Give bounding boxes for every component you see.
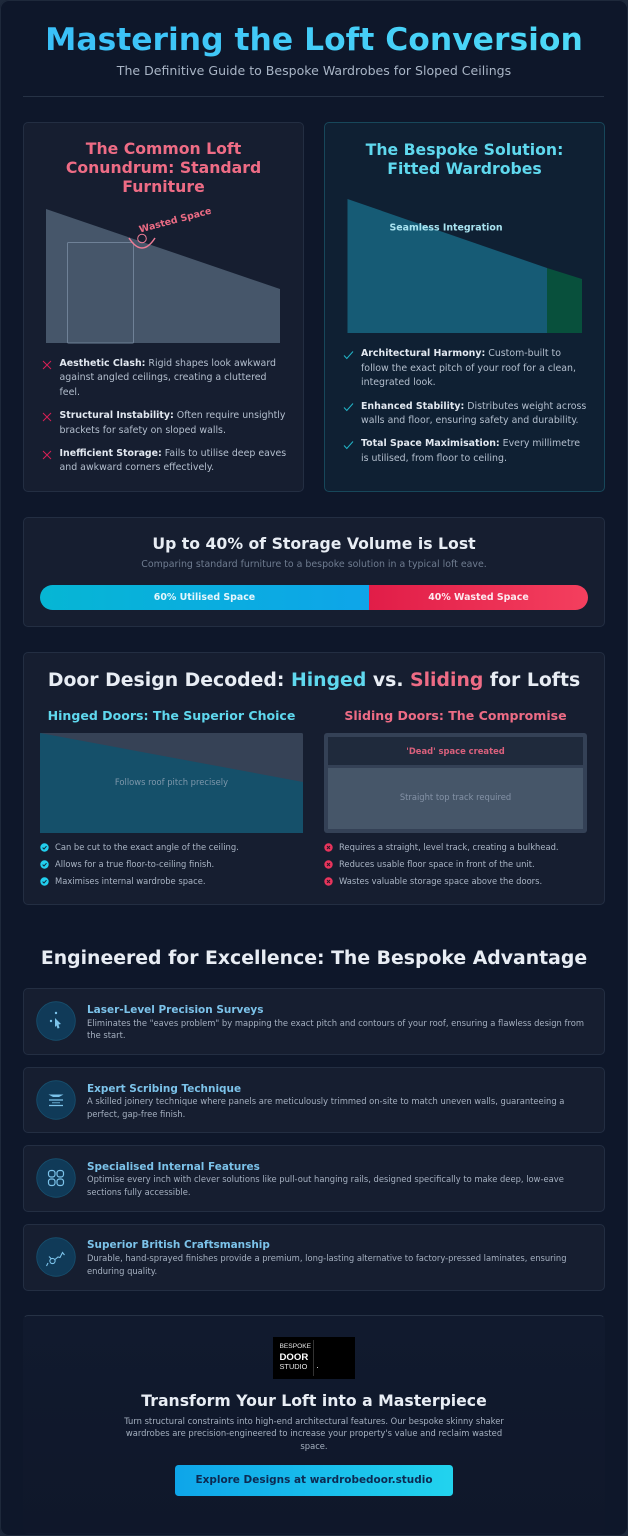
bar segment: 60% utilised [40,585,369,610]
card description: the start. [87,1030,126,1040]
card description: enduring quality. [87,1266,157,1276]
card title: Specialised Internal Features [87,1160,260,1172]
text: enhanced stability [361,400,586,426]
icon: check [344,441,354,450]
card description: Eliminates the "eaves problem" by mapping the exact pitch and contours of your roof, ensuring a flawless design from [87,1018,584,1028]
header [45,22,583,78]
subtitle: The Definitive Guide to Bespoke Wardrobes for Sloped Ceilings [117,63,511,78]
stat heading: Up to 40% of Storage Volume is Lost [152,534,476,552]
logo: Bespoke Door Studio [273,1337,355,1379]
diagram: hinged door: Follows roof pitch precisely [115,777,228,787]
CTA text: space. [300,1441,328,1451]
logo text: STUDIO [280,1362,307,1370]
list: problems [42,358,286,473]
text: inefficient storage: and awkward corners effectively. [60,462,214,473]
text: architectural harmony: integrated look. [361,377,436,388]
panel: storage volume stat [23,517,605,627]
text: internal space: Maximises internal wardrobe space. [55,876,206,886]
section heading: door design: Door Design Decoded: Hinged vs. Sliding for Lofts [48,670,580,691]
card description [87,1253,567,1276]
icon: check [344,403,354,412]
icon: cross badge [324,843,333,852]
card description [87,1174,564,1197]
title: Mastering the Loft Conversion [45,22,583,58]
panel heading: fitted wardrobes [366,140,563,178]
icon: cross badge [324,877,333,886]
text: enhanced stability: Enhanced Stability: Distributes weight across [361,400,586,412]
text: floor to ceiling: Allows for a true floor-to-ceiling finish. [55,859,214,869]
card description: Durable, hand-sprayed finishes provide a premium, long-lasting alternative to factory-pressed laminates, ensuring [87,1253,567,1263]
door front: Straight top track required [400,792,511,802]
section heading: bespoke advantage: Engineered for Excellence: The Bespoke Advantage [41,948,587,969]
icon: cross [42,360,52,370]
text: structural instability: Structural Instability: Often require unsightly [60,410,285,421]
text: architectural harmony [361,348,576,388]
panel: bespoke solution [324,122,605,492]
diagram: fitted wardrobe under sloped roof [348,199,582,333]
card description: sections fully accessible. [87,1187,191,1197]
panel heading: fitted wardrobes: The Bespoke Solution: [366,140,563,159]
icon: spray gun [36,1237,76,1277]
text: aesthetic clash: Aesthetic Clash: Rigid shapes look awkward [60,358,276,368]
diagram: hinged door [40,733,303,833]
icon: check [344,351,354,360]
list: sliding cons [324,842,559,886]
card title: Expert Scribing Technique [87,1082,241,1094]
diagram: sliding door [324,733,587,833]
card title: Superior British Craftsmanship [87,1238,270,1250]
card: internal features [23,1145,605,1212]
door front [328,768,583,829]
icon: scribing lines [36,1080,76,1120]
card description [87,1096,564,1119]
list: benefits [344,348,586,464]
panel heading: standard furniture: Furniture [122,177,205,196]
icon: check badge [40,877,49,886]
text: aesthetic clash: feel. [60,387,80,398]
CTA heading: Transform Your Loft into a Masterpiece [141,1390,487,1410]
text: inefficient storage [60,448,286,473]
dead space [328,737,583,765]
CTA button [175,1465,453,1496]
bar segment: 40% wasted: 40% Wasted Space [428,592,529,603]
dead space: 'Dead' space created [406,746,505,756]
panel heading: standard furniture [66,139,261,196]
bar segment: 40% wasted [369,585,588,610]
card: expert scribing [23,1067,605,1133]
panel: common loft conundrum [23,122,304,492]
logo text: DOOR [280,1352,308,1362]
diagram: standard furniture under sloped roof: Wasted Space [138,206,213,236]
CTA button: Explore Designs at wardrobedoor.studio [195,1474,433,1486]
card description: A skilled joinery technique where panels are meticulously trimmed on-site to match uneven walls, guaranteeing a [87,1096,564,1106]
text: exact angle: Can be cut to the exact angle of the ceiling. [55,842,239,852]
CTA text: wardrobes are precision-engineered to increase your property's value and reclaim wasted [126,1428,502,1438]
text: level track: Requires a straight, level track, creating a bulkhead. [339,842,559,852]
card title: Laser-Level Precision Surveys [87,1004,263,1016]
text: enhanced stability: walls and floor, ensuring safety and durability. [361,415,579,426]
panel heading: fitted wardrobes: Fitted Wardrobes [387,159,542,178]
text: floor space: Reduces usable floor space in front of the unit. [339,859,535,869]
card description [87,1018,584,1040]
text: total space maximisation: Total Space Maximisation: Every millimetre [361,438,580,449]
icon: laser target [36,1001,76,1041]
card: laser surveys [23,988,605,1055]
text: storage above doors: Wastes valuable storage space above the doors. [339,876,542,886]
text: total space maximisation: is utilised, from floor to ceiling. [361,453,507,464]
icon: cross [42,450,52,460]
card: british craftsmanship [23,1224,605,1291]
card description: Optimise every inch with clever solutions like pull-out hanging rails, designed specifically to make deep, low-eave [87,1174,564,1184]
card description: perfect, gap-free finish. [87,1109,185,1119]
list: hinged pros [40,842,239,886]
text: architectural harmony: Architectural Harmony: Custom-built to [361,348,561,359]
column heading: sliding: Sliding Doors: The Compromise [344,708,567,723]
text: structural instability: brackets for safety on sloped walls. [60,425,226,436]
logo text: BESPOKE [280,1343,311,1350]
icon: check badge [40,843,49,852]
diagram: standard furniture under sloped roof [46,206,280,344]
diagram: fitted wardrobe under sloped roof: Seamless Integration [389,222,503,234]
text: structural instability [60,410,286,436]
CTA text [124,1416,504,1451]
text: total space maximisation [361,438,580,464]
icon: cross [42,412,52,422]
panel: door design comparison [23,652,605,905]
icon: four rounded squares [36,1158,76,1198]
logo text [280,1343,311,1370]
icon: check badge [40,860,49,869]
text: aesthetic clash: against angled ceilings, creating a cluttered [60,372,267,383]
bar segment: 60% utilised: 60% Utilised Space [154,592,255,603]
text: architectural harmony: follow the exact pitch of your roof for a clean, [361,363,576,374]
text: aesthetic clash [60,358,276,398]
text: inefficient storage: Inefficient Storage: Fails to utilise deep eaves [60,448,286,458]
stat subheading: Comparing standard furniture to a bespoke solution in a typical loft eave. [141,559,487,570]
panel heading: standard furniture: Conundrum: Standard [66,158,261,177]
chart: utilised vs wasted bar [40,585,588,610]
icon: cross badge [324,860,333,869]
CTA text: Turn structural constraints into high-end architectural features. Our bespoke skinny shaker [124,1416,504,1426]
panel heading: standard furniture: The Common Loft [86,139,241,158]
panel: call to action [23,1315,605,1534]
column heading: hinged: Hinged Doors: The Superior Choice [48,708,295,723]
